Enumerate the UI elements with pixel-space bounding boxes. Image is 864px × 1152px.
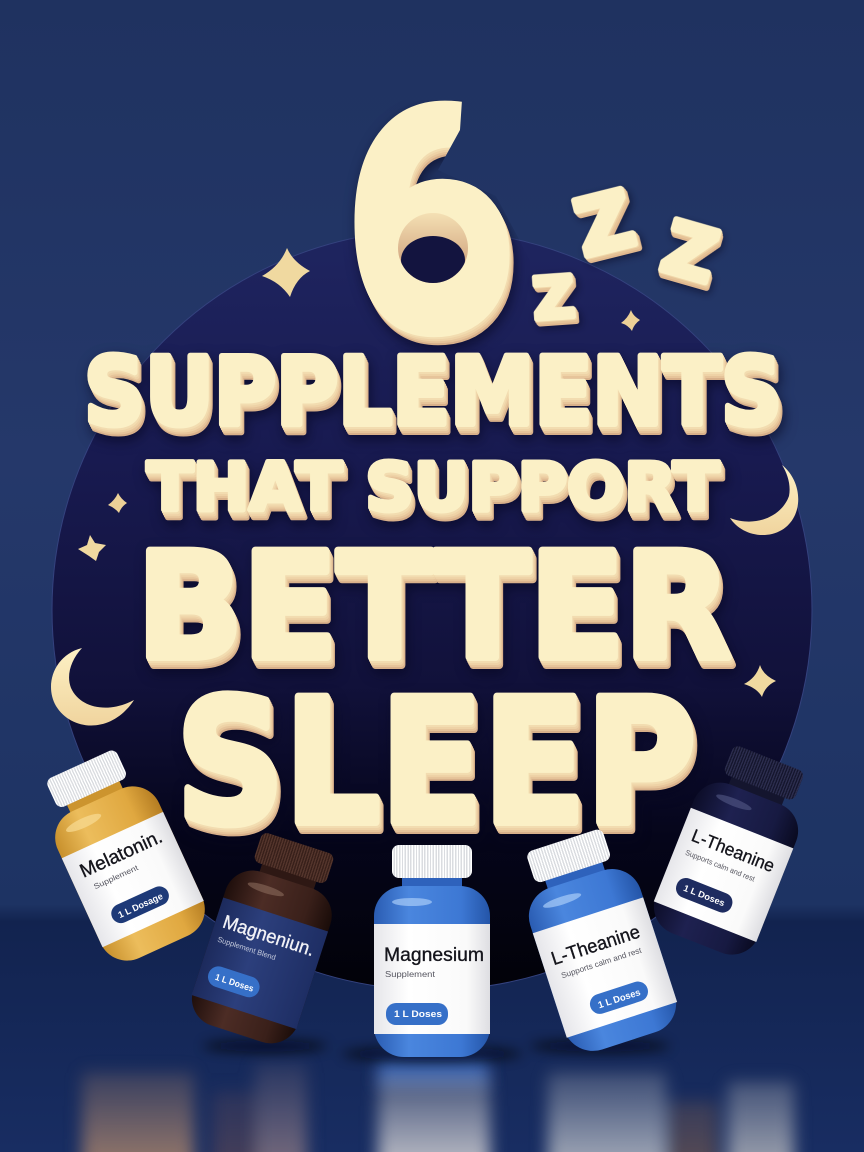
bottle: l-theanine navy <box>645 738 821 963</box>
bottle: magnesium blue: 1 L Doses <box>394 1009 442 1020</box>
icon: crescent moon right <box>730 465 798 535</box>
floor reflections <box>82 1056 794 1152</box>
bottle: magnesium brown: Supplement Blend <box>216 935 277 962</box>
icon: star right <box>744 665 776 697</box>
backdrop circle <box>52 230 812 990</box>
heading numeral 6: 6 <box>343 50 519 399</box>
bottle: magnesium brown: Magneniun. <box>220 912 317 961</box>
bottle: l-theanine blue: Supports calm and rest <box>560 945 643 980</box>
title line: that support: THAT SUPPORT <box>147 449 719 526</box>
bottle: magnesium brown <box>184 826 351 1051</box>
bottle: l-theanine navy: L-Theanine <box>689 825 777 876</box>
bottle: melatonin <box>29 741 214 970</box>
title line: better: BETTER <box>137 522 731 692</box>
bottle: melatonin: Supplement <box>92 863 140 891</box>
icon: star left small <box>108 493 127 513</box>
floor shadow under bottles <box>203 1040 670 1061</box>
icon: star left five point <box>78 535 106 561</box>
bottle: l-theanine blue <box>508 822 684 1059</box>
icon: medium z: Z <box>566 174 643 275</box>
bottle: magnesium brown: 1 L Doses <box>214 972 255 994</box>
title line: supplements: SUPPLEMENTS <box>84 338 782 447</box>
bottle: l-theanine blue: 1 L Doses <box>597 987 642 1011</box>
icon: crescent moon left <box>51 648 134 726</box>
bottle: l-theanine navy: Supports calm and rest <box>684 848 757 884</box>
title line: sleep: SLEEP <box>176 662 696 863</box>
icon: star small right <box>621 310 640 331</box>
bottle: magnesium blue <box>374 845 490 1057</box>
bottle: magnesium blue: Supplement <box>385 970 436 979</box>
bottle: melatonin: 1 L Dosage <box>117 891 164 920</box>
bottle: l-theanine navy: 1 L Doses <box>682 883 726 908</box>
bottle: magnesium blue: Magnesium <box>384 944 484 966</box>
icon: large z: Z <box>653 204 727 300</box>
icon: star top left <box>262 248 310 297</box>
bottle: l-theanine blue: L-Theanine <box>549 922 643 970</box>
icon: small z: Z <box>530 263 577 333</box>
bottle: melatonin: Melatonin. <box>77 827 166 882</box>
heading numeral 6 <box>350 100 520 354</box>
